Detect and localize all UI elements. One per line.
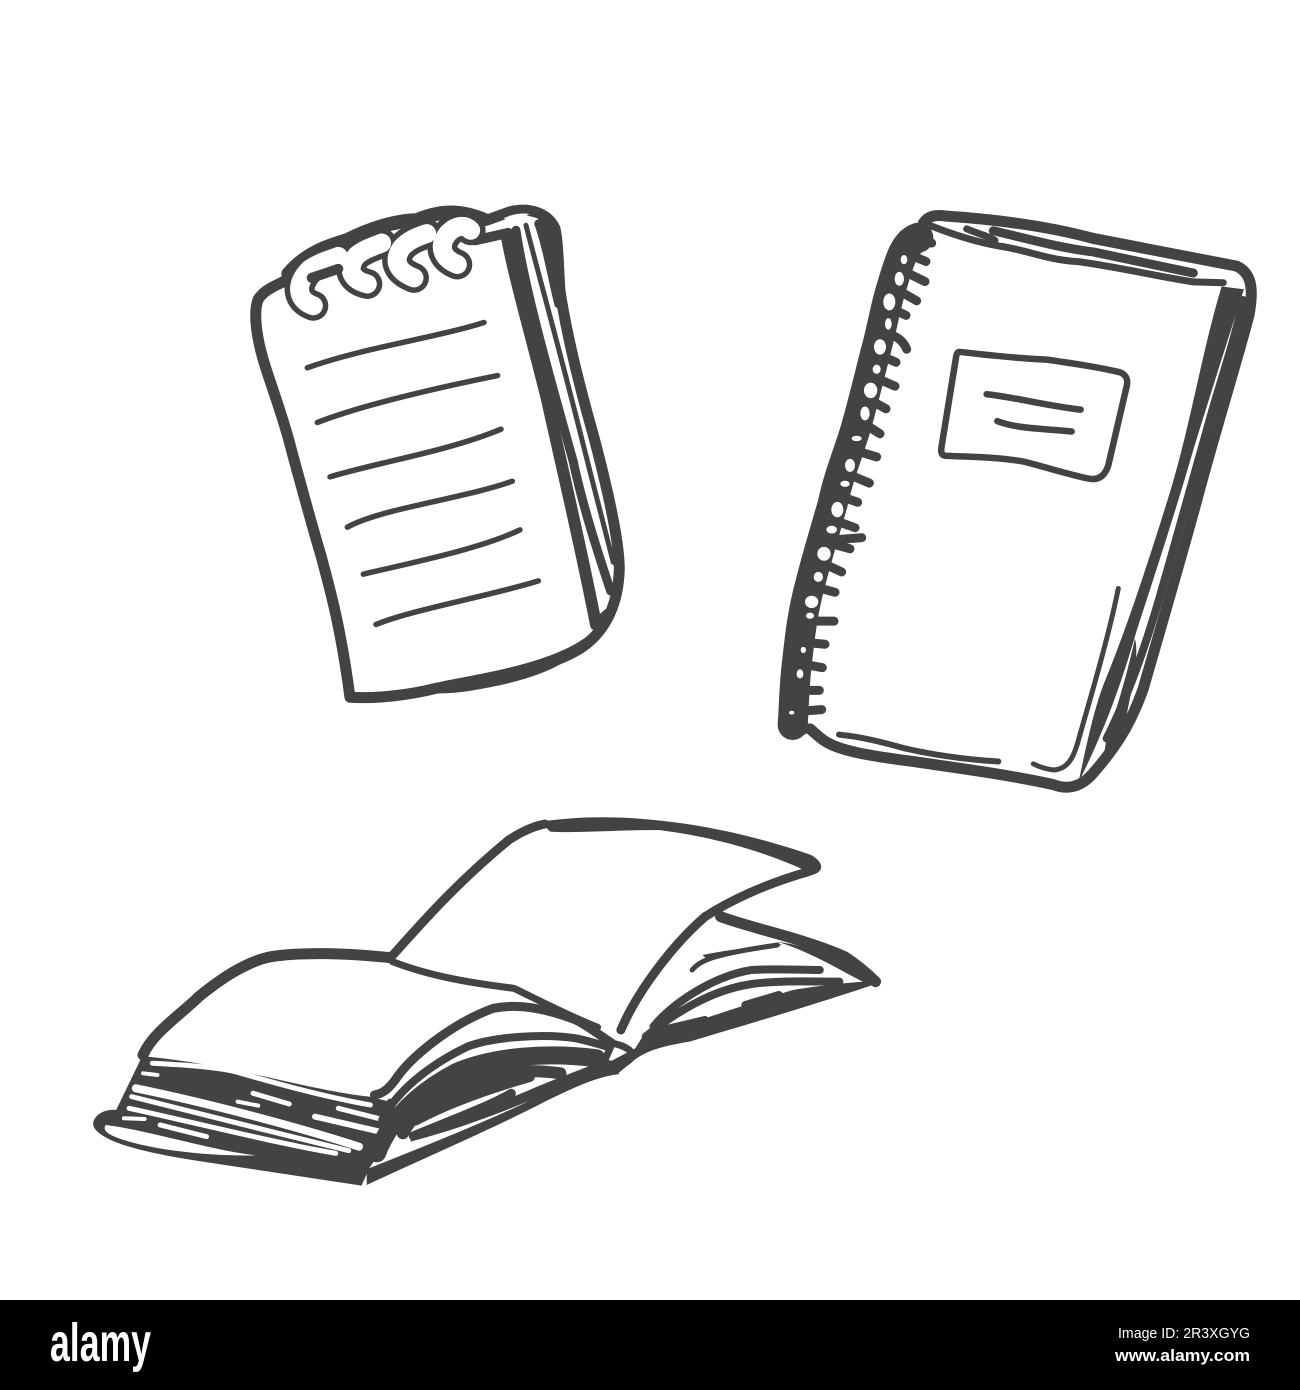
icon: open book with lifted page xyxy=(93,817,880,1186)
notebook page lines on side xyxy=(839,300,1243,770)
book lower left fill xyxy=(411,1063,602,1142)
icon: spiral-bound closed notebook xyxy=(779,216,1251,787)
dark side wedge xyxy=(1078,287,1244,783)
lifted page right edge xyxy=(621,872,808,1030)
notepad outline xyxy=(256,210,619,698)
left fanned pages xyxy=(374,1006,612,1153)
lifted page thick top edge xyxy=(540,817,821,876)
right cover dark tip xyxy=(597,942,880,1075)
page stack edges xyxy=(503,210,613,624)
notepad bottom shadow xyxy=(427,638,585,693)
page ruled lines xyxy=(307,323,538,624)
alamy logo: alamy xyxy=(50,1313,151,1373)
book stack block xyxy=(93,1057,393,1186)
spine knob xyxy=(604,1043,632,1064)
spiral binding rings xyxy=(288,212,483,306)
footer background xyxy=(0,1300,1300,1390)
lifted page xyxy=(390,824,545,958)
right back cover xyxy=(721,917,876,982)
image id: Image ID: 2R3XGYG xyxy=(1118,1325,1250,1342)
spiral spine xyxy=(779,235,932,737)
notepad page top edge xyxy=(475,233,508,240)
footer bar xyxy=(0,1300,1300,1390)
stack page stripes xyxy=(105,1063,385,1155)
icon: spiral notepad with lined page xyxy=(256,210,619,698)
right fanned pages xyxy=(646,944,839,1037)
cover top edge lines xyxy=(932,226,1239,283)
page crease curve xyxy=(393,962,598,1027)
website: www.alamy.com xyxy=(1114,1346,1250,1365)
cover label xyxy=(941,352,1127,479)
book underside xyxy=(367,1063,620,1185)
left page outline xyxy=(143,954,390,1055)
notebook outline xyxy=(810,216,1251,787)
